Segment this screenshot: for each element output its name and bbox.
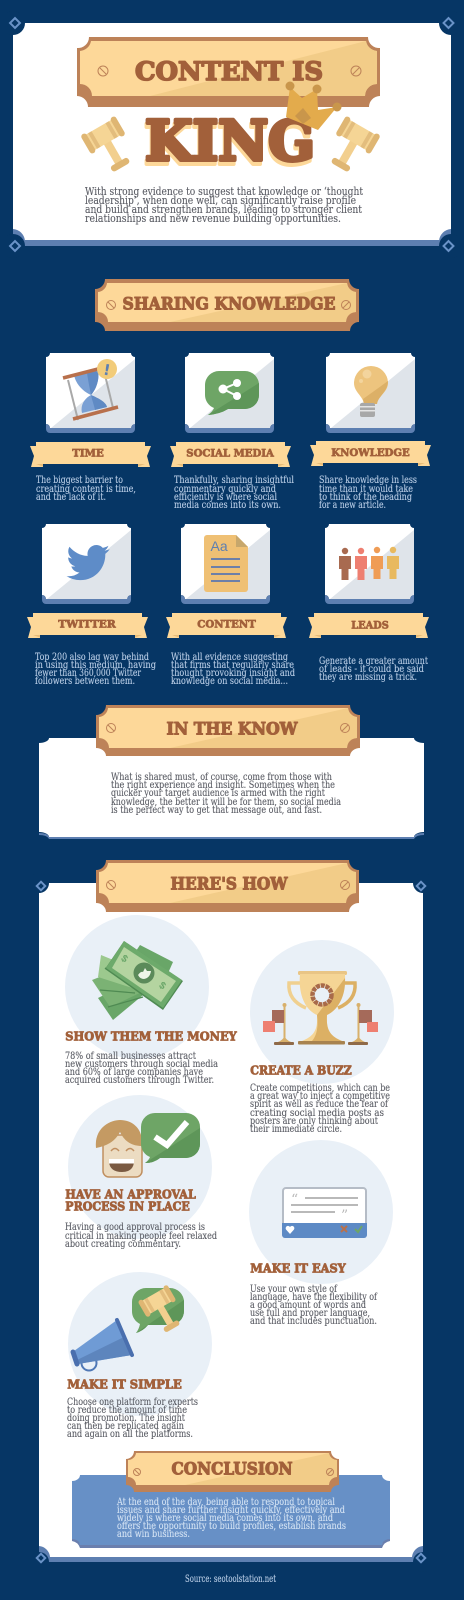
text: content: thought provoking insight and — [171, 668, 295, 679]
text: leads: of leads - it could be said — [319, 664, 424, 675]
icon: money: $ — [157, 980, 168, 993]
text: time — [36, 475, 136, 503]
icon: crown — [286, 82, 342, 130]
panel: in the know — [39, 705, 424, 839]
heading: SHOW THEM THE MONEY — [65, 1029, 238, 1044]
text: can then be replicated again — [67, 1421, 184, 1432]
panel: conclusion — [72, 1451, 390, 1548]
card: content — [181, 524, 270, 604]
text: Choose one platform for experts — [67, 1397, 198, 1408]
text: Use your own style of — [250, 1284, 338, 1295]
ribbon: leads — [308, 613, 429, 638]
icon: megaphone — [73, 1320, 132, 1370]
text: knowledge: Share knowledge in less — [319, 475, 417, 486]
section: show them the money — [65, 915, 238, 1086]
intro text: relationships and new revenue building opportunities. — [85, 212, 341, 225]
icon: people — [339, 547, 399, 580]
text: 78% of small businesses attract — [65, 1051, 196, 1062]
ribbon: social media: SOCIAL MEDIA — [186, 448, 275, 460]
panel: intro — [1, 11, 463, 258]
icon: trophy — [263, 971, 378, 1045]
text: a great way to inject a competitive — [250, 1091, 390, 1102]
text: knowledge: for a new article. — [319, 500, 386, 511]
text: content: that firms that regularly share — [171, 660, 294, 671]
text: knowledge — [319, 475, 417, 511]
ribbon: leads: LEADS — [351, 620, 389, 632]
text: in the know: quicker your target audience is armed with the right — [111, 788, 325, 799]
card: twitter — [42, 524, 131, 604]
icon: review card: “ — [291, 1192, 298, 1208]
text: in the know: is the perfect way to get that message out, and fast. — [111, 805, 322, 816]
text: posters are only thinking about — [250, 1116, 378, 1127]
icon: review card — [282, 1188, 367, 1238]
text: twitter: fewer than 360,000 Twitter — [35, 668, 141, 679]
text: new customers through social media — [65, 1059, 218, 1070]
text: time: and the lack of it. — [36, 492, 106, 503]
card: knowledge — [326, 353, 415, 433]
text: and again on all the platforms. — [67, 1429, 193, 1440]
intro text — [85, 185, 364, 225]
section: make it simple — [67, 1272, 212, 1440]
text: their immediate circle. — [250, 1124, 342, 1135]
text: knowledge: time than it would take — [319, 484, 413, 495]
icon: money — [92, 941, 183, 1020]
icon: share bubble — [205, 371, 259, 415]
text: and 60% of large companies have — [65, 1067, 203, 1078]
icon: twitter bird — [66, 545, 110, 580]
icon: document: Aa — [210, 538, 228, 554]
heading: CREATE A BUZZ — [250, 1063, 352, 1078]
text: creating social media posts as — [250, 1108, 384, 1119]
plaque: conclusion: CONCLUSION — [172, 1460, 292, 1478]
text: time: creating content is time, — [36, 484, 136, 495]
text: conclusion: offers the opportunity to build profiles, establish brands — [117, 1521, 346, 1532]
panel: here's how — [29, 860, 433, 1572]
text: doing promotion. The insight — [67, 1413, 185, 1424]
text: twitter: in using this medium, having — [35, 660, 156, 671]
heading — [65, 1187, 196, 1214]
text: Create competitions, which can be — [250, 1083, 390, 1094]
text: spirit as well as reduce the fear of — [250, 1099, 389, 1110]
ribbon: content: CONTENT — [197, 619, 256, 631]
plaque: in the know: IN THE KNOW — [166, 720, 298, 738]
section: approval process — [65, 1095, 217, 1250]
text: critical in making people feel relaxed — [65, 1231, 217, 1242]
icon: hourglass: ! — [102, 361, 112, 379]
text: social media: efficiently is where social — [174, 492, 277, 503]
text: leads: Generate a greater amount — [319, 656, 428, 667]
text — [250, 1284, 378, 1327]
text: twitter: followers between them. — [35, 676, 135, 687]
ribbon: social media — [170, 442, 291, 467]
heading: MAKE IT EASY — [250, 1261, 347, 1276]
text: social media — [174, 475, 294, 511]
plaque: sharing knowledge — [95, 279, 359, 331]
text: leads — [319, 656, 428, 683]
icon: review card: ” — [341, 1208, 348, 1224]
text: in the know — [111, 772, 341, 816]
heading: MAKE IT SIMPLE — [67, 1377, 182, 1392]
section: create a buzz — [250, 940, 394, 1135]
icon: gavel bubble — [132, 1284, 188, 1337]
ribbon: knowledge — [310, 441, 431, 466]
plaque: sharing knowledge: SHARING KNOWLEDGE — [122, 294, 336, 314]
text: in the know: knowledge, the better it will be for them, so social media — [111, 797, 341, 808]
plaque: in the know — [96, 705, 360, 756]
icon: money: $ — [119, 953, 130, 966]
text: social media: commentary quickly and — [174, 484, 276, 495]
text — [67, 1397, 198, 1440]
card: social media — [185, 353, 274, 433]
plaque: here's how: HERE'S HOW — [170, 874, 288, 894]
text: content: knowledge on social media... — [171, 676, 288, 687]
text: in the know: the right experience and insight. Sometimes when the — [111, 780, 335, 791]
heading: PROCESS IN PLACE — [65, 1199, 190, 1214]
heading: king: KING — [144, 112, 314, 177]
text: a good amount of words and — [250, 1300, 366, 1311]
text: twitter — [35, 652, 156, 687]
text: conclusion: widely is where social media comes into its own, and — [117, 1513, 333, 1524]
title plaque — [77, 37, 380, 107]
text: social media: Thankfully, sharing insightful — [174, 475, 294, 486]
text: conclusion: and win business. — [117, 1529, 190, 1540]
text: Having a good approval process is — [65, 1222, 205, 1233]
text: about creating commentary. — [65, 1239, 181, 1250]
text: twitter: Top 200 also lag way behind — [35, 652, 149, 663]
intro text: leadership’, when done well, can significantly raise profile — [85, 194, 356, 207]
text: to reduce the amount of time — [67, 1405, 187, 1416]
card: leads — [325, 524, 414, 604]
icon: right gavel — [322, 115, 381, 177]
text: content: With all evidence suggesting — [171, 652, 288, 663]
text: in the know: What is shared must, of course, come from those with — [111, 772, 332, 783]
text: conclusion — [116, 1497, 346, 1540]
icon: check bubble — [141, 1113, 200, 1163]
text: content — [171, 652, 295, 687]
heading: content is: CONTENT IS — [135, 57, 323, 87]
intro text: With strong evidence to suggest that knowledge or ‘thought — [85, 185, 364, 198]
card: time — [46, 353, 135, 433]
icon: smiling face — [96, 1120, 142, 1177]
heading: king: KING — [145, 108, 315, 173]
text — [65, 1222, 217, 1250]
text: leads: they are missing a trick. — [319, 672, 417, 683]
ribbon: content — [166, 613, 287, 638]
intro text: and build and strengthen brands, leading to stronger client — [85, 203, 363, 216]
text — [250, 1083, 390, 1135]
section: make it easy — [249, 1140, 393, 1327]
ribbon: twitter — [27, 613, 148, 638]
text: knowledge: to think of the heading — [319, 492, 412, 503]
text: use full and proper language, — [250, 1308, 370, 1319]
text: conclusion: At the end of the day, being able to respond to topical — [116, 1497, 335, 1508]
source: Source: seotoolstation.net — [185, 1574, 276, 1585]
heading: HAVE AN APPROVAL — [65, 1187, 196, 1202]
plaque: conclusion — [126, 1451, 339, 1492]
icon: light bulb — [354, 366, 388, 417]
ribbon: twitter: TWITTER — [58, 619, 116, 631]
icon: left gavel — [80, 115, 139, 177]
text: language, have the flexibility of — [250, 1292, 378, 1303]
text: and that includes punctuation. — [250, 1316, 377, 1327]
plaque: here's how — [96, 860, 359, 912]
ribbon: knowledge: KNOWLEDGE — [331, 447, 410, 459]
text: conclusion: issues and share further insight quickly, effectively and — [117, 1505, 345, 1516]
ribbon: time: TIME — [72, 448, 104, 460]
text: time: The biggest barrier to — [36, 475, 123, 486]
text: social media: media comes into its own. — [174, 500, 281, 511]
text — [65, 1051, 218, 1086]
text: acquired customers through Twitter. — [65, 1075, 214, 1086]
ribbon: time — [30, 442, 151, 467]
